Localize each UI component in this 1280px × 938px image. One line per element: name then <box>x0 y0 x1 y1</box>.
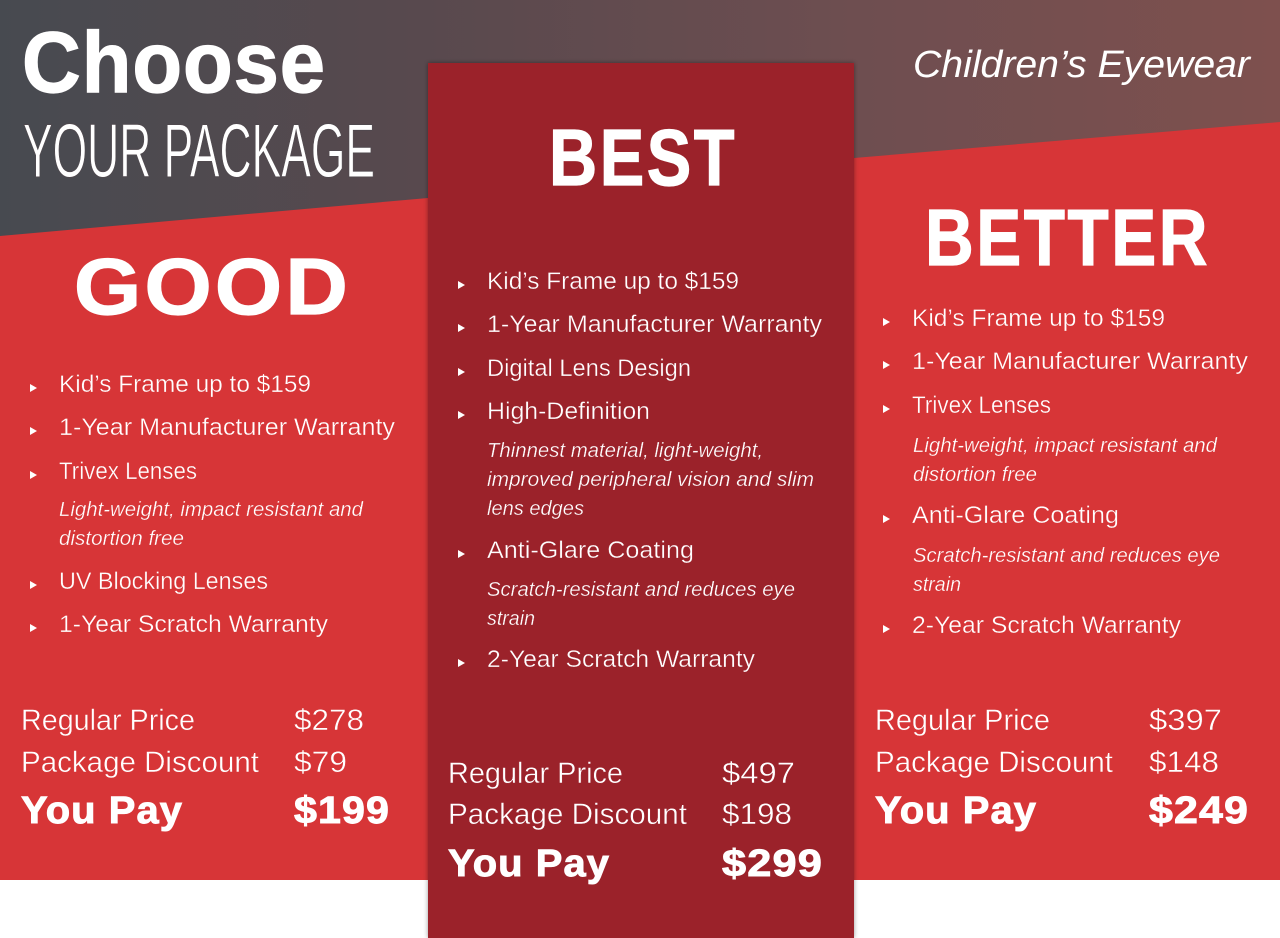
pricing: good: $199 <box>294 790 390 832</box>
pricing: better: Package Discount <box>875 746 1114 779</box>
pricing: best: $299 <box>722 843 823 885</box>
feature list: best <box>458 268 822 673</box>
heading: good: GOOD <box>74 242 351 331</box>
feature list: better: Light-weight, impact resistant and <box>913 435 1218 457</box>
feature list: best: Thinnest material, light-weight, <box>487 440 763 462</box>
pricing: better: $397 <box>1149 704 1222 737</box>
feature list: best: Digital Lens Design <box>487 355 691 382</box>
feature list: better: strain <box>913 574 961 596</box>
pricing: good <box>21 704 390 832</box>
panel: best <box>428 63 854 938</box>
panel: good background <box>0 198 428 880</box>
bullets <box>30 384 37 632</box>
bullets <box>458 281 465 667</box>
pricing: better: $249 <box>1149 790 1249 832</box>
feature list: better: Kid’s Frame up to $159 <box>912 305 1165 332</box>
subtitle: Children’s Eyewear <box>913 44 1251 86</box>
feature list: best: lens edges <box>487 498 584 520</box>
pricing: better: You Pay <box>875 790 1037 832</box>
feature list: good: Light-weight, impact resistant and <box>59 499 364 521</box>
feature list: best: strain <box>487 608 535 630</box>
panel: better background <box>854 122 1280 880</box>
title <box>22 15 375 194</box>
bullets <box>883 318 890 633</box>
feature list: good: 1-Year Manufacturer Warranty <box>59 414 395 441</box>
heading: better: BETTER <box>925 193 1210 282</box>
feature list: best: Kid’s Frame up to $159 <box>487 268 739 295</box>
heading: best: BEST <box>549 113 737 202</box>
feature list: better: 2-Year Scratch Warranty <box>912 612 1181 639</box>
feature list: good: UV Blocking Lenses <box>59 568 268 595</box>
feature list: best: 2-Year Scratch Warranty <box>487 646 755 673</box>
pricing: better: $148 <box>1149 746 1219 779</box>
feature list: good: distortion free <box>59 528 184 550</box>
panel: good <box>21 242 395 832</box>
feature list: good: 1-Year Scratch Warranty <box>59 611 328 638</box>
pricing: good: $79 <box>294 746 347 779</box>
pricing: good: Package Discount <box>21 746 260 779</box>
pricing: better <box>875 704 1249 832</box>
feature list: best: improved peripheral vision and slim <box>487 469 814 491</box>
pricing: best <box>448 757 823 885</box>
header background <box>0 0 1280 260</box>
pricing: good: Regular Price <box>21 704 195 737</box>
pricing: good: $278 <box>294 704 364 737</box>
pricing: better: Regular Price <box>875 704 1050 737</box>
pricing: good: You Pay <box>21 790 183 832</box>
pricing: best: Package Discount <box>448 798 688 831</box>
feature list: better <box>883 305 1248 639</box>
pricing: best: $198 <box>722 798 792 831</box>
feature list: best: 1-Year Manufacturer Warranty <box>487 311 822 338</box>
feature list: good: Trivex Lenses <box>59 458 197 485</box>
pricing: best: $497 <box>722 757 795 790</box>
feature list: better: Anti-Glare Coating <box>912 502 1119 529</box>
pricing: best: You Pay <box>448 843 610 885</box>
feature list: better: 1-Year Manufacturer Warranty <box>912 348 1248 375</box>
feature list: best: Scratch-resistant and reduces eye <box>487 579 795 601</box>
feature list: better: Trivex Lenses <box>912 392 1051 419</box>
title: your package: YOUR PACKAGE <box>23 109 375 194</box>
feature list: better: distortion free <box>913 464 1037 486</box>
pricing: best: Regular Price <box>448 757 623 790</box>
panel: better <box>875 193 1249 832</box>
feature list: good: Kid’s Frame up to $159 <box>59 371 311 398</box>
feature list: best: Anti-Glare Coating <box>487 537 694 564</box>
feature list: better: Scratch-resistant and reduces eye <box>913 545 1220 567</box>
best background <box>428 63 854 938</box>
feature list: best: High-Definition <box>487 398 650 425</box>
feature list: good <box>30 371 395 638</box>
title: choose: Choose <box>22 15 326 111</box>
